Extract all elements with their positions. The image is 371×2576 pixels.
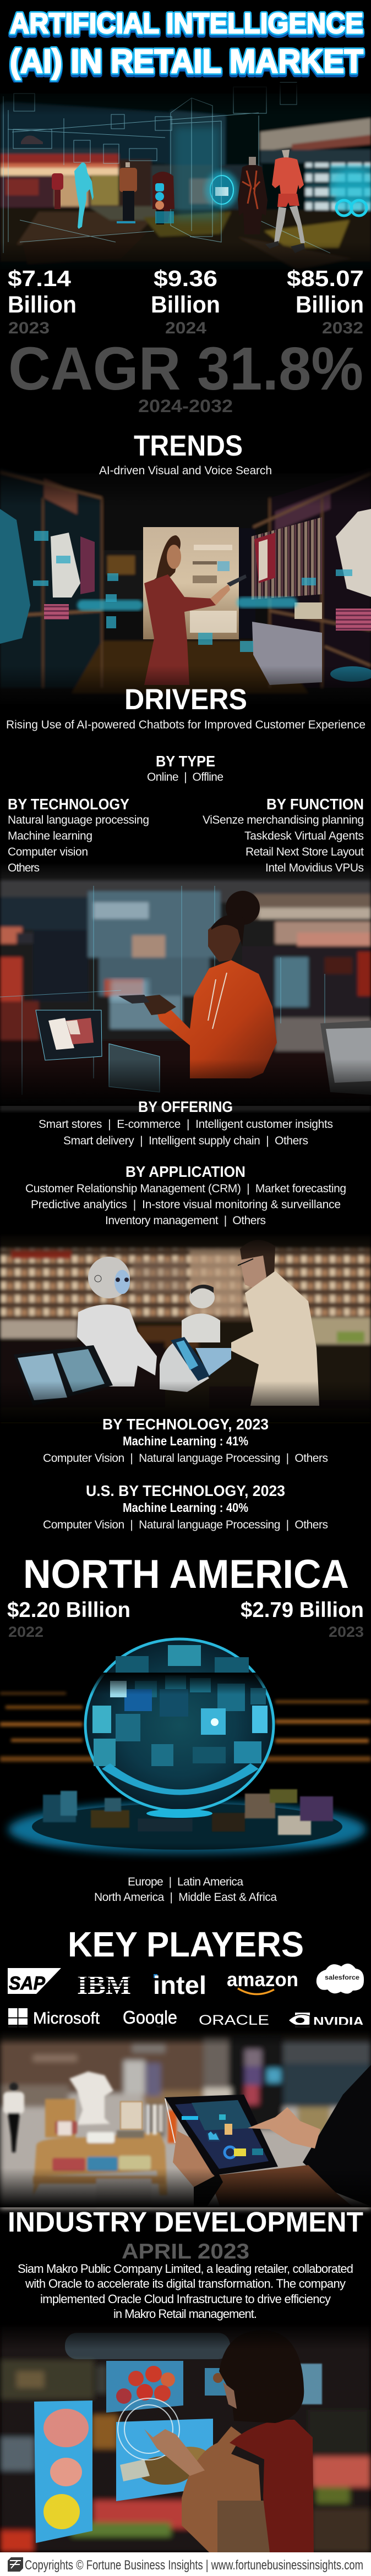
logo: intel: intel — [153, 1971, 206, 1999]
CAGR period: 2024-2032 — [138, 396, 233, 416]
illustration: blurred store with tablet — [0, 2025, 371, 2209]
hologram glow — [110, 979, 149, 1001]
hanging rail clothes — [146, 2104, 177, 2143]
stat: 2024 market size — [151, 266, 220, 337]
stat: 2022 region size — [7, 1598, 130, 1640]
floating hologram tags — [33, 531, 352, 652]
heading: key players: KEY PLAYERS — [68, 1925, 304, 1964]
logo: salesforce: salesforce — [325, 1974, 359, 1981]
stat: U.S. by technology 2023: U.S. BY TECHNOLOGY, 2023 — [86, 1482, 285, 1499]
stat: 2023 market size: 2023 — [8, 319, 50, 337]
segment: by function: ViSenze merchandising planning — [203, 814, 364, 826]
stat: 2032 market size — [287, 266, 364, 337]
top fade — [0, 83, 371, 116]
logo: IBM: IBM — [77, 1970, 131, 2000]
hologram chart panel — [109, 1044, 160, 1092]
wireframe display boxes — [3, 83, 330, 253]
CAGR: CAGR 31.8% — [8, 335, 363, 403]
icon: Fortune Business Insights — [8, 2557, 23, 2572]
section: industry development — [8, 2206, 363, 2321]
segment: by application: Customer Relationship Management (CRM) | Market forecasting — [25, 1182, 346, 1195]
scanner device — [160, 1337, 211, 1392]
wooden display table — [33, 2099, 167, 2206]
glow: cyan hologram orb — [205, 171, 238, 209]
bottom fade — [0, 1843, 371, 1865]
stat: 2023 market size: Billion — [8, 292, 77, 318]
figure: red shirt mannequin — [265, 150, 305, 253]
display: car panel — [21, 135, 43, 144]
illustration: woman with tablet in clothing store — [0, 462, 371, 710]
stat: by technology 2023: Computer Vision | Natural language Processing | Others — [43, 1452, 328, 1465]
blurred store background — [0, 2033, 371, 2209]
miniature buildings — [43, 1789, 333, 1835]
cream sign frame — [121, 2102, 142, 2129]
logo: SAP: SAP — [9, 1973, 45, 1994]
stat: 2032 market size: Billion — [296, 292, 364, 318]
right rack: white shirt — [336, 509, 371, 597]
regions list — [94, 1876, 277, 1904]
top fade — [0, 1230, 371, 1257]
touch screens — [14, 1345, 113, 1406]
illustration: woman in orange hoodie — [0, 861, 371, 1111]
bottom fade — [0, 242, 371, 281]
glow: right hologram — [331, 168, 371, 216]
stat: 2022 region size: $2.20 Billion — [7, 1598, 130, 1622]
logo: amazon: amazon — [227, 1968, 298, 1991]
logo: Microsoft — [8, 2008, 100, 2027]
mannequin white tee — [69, 2071, 113, 2125]
left rack: pink clothes — [44, 536, 95, 620]
segment: by offering — [39, 1098, 333, 1147]
stat: 2023 region size — [241, 1598, 364, 1640]
stat: 2022 region size: 2022 — [8, 1624, 43, 1640]
illustration: holographic clothing store — [0, 83, 371, 281]
segment: by offering: Smart delivery | Intelligent supply chain | Others — [63, 1134, 308, 1147]
logo: Oracle: ORACLE — [199, 2013, 269, 2028]
section: trends: TRENDS — [134, 430, 243, 462]
title — [10, 8, 363, 82]
tablet — [165, 2095, 278, 2175]
segment: by technology — [8, 796, 149, 874]
hologram base right — [330, 666, 371, 682]
segment: by application: BY APPLICATION — [126, 1163, 245, 1180]
section: trends — [99, 430, 272, 477]
illustration: woman browsing virtual grocery panels — [0, 2322, 371, 2553]
right rack: striped shirts — [251, 517, 322, 600]
stat: U.S. by technology 2023: Computer Vision | Natural language Processing | Others — [43, 1519, 328, 1531]
segment: by function: Taskdesk Virtual Agents — [244, 830, 364, 842]
right rack: pink stack — [294, 602, 371, 631]
right hand — [248, 2107, 320, 2149]
segment: by function — [203, 796, 364, 874]
illustration: holographic globe over city — [0, 1639, 371, 1865]
figure: hoodie strings — [208, 973, 227, 1029]
city lights — [0, 1692, 371, 1762]
footer — [0, 2552, 371, 2576]
figure: plaid jacket mannequin — [238, 157, 268, 234]
store window — [143, 527, 239, 639]
section: by type: Online | Offline — [147, 771, 223, 783]
bottom fade — [0, 1381, 371, 1422]
section: by type — [147, 753, 223, 783]
left rack: white shirt — [51, 533, 80, 598]
hologram glow band right — [237, 597, 297, 608]
stat: 2024 market size: $9.36 — [154, 266, 217, 291]
segment: by function: Intel Movidius VPUs — [265, 862, 364, 874]
robot: body — [77, 1305, 157, 1386]
panel: right blurred — [296, 2364, 322, 2404]
figure: hand and phone — [118, 995, 176, 1015]
segment: by offering: Smart stores | E-commerce | Intelligent customer insights — [39, 1118, 333, 1131]
bottom fade — [0, 2168, 371, 2207]
figure: face — [208, 922, 241, 962]
regions list: Europe | Latin America — [128, 1876, 243, 1888]
tablet right — [320, 1021, 371, 1095]
sleeve right — [303, 2065, 371, 2206]
robot: small — [182, 1285, 220, 1342]
bottom fade — [0, 666, 371, 710]
segment: by application: Predictive analytics | In-store visual monitoring & surveillance — [31, 1198, 341, 1211]
section: industry development: in Makro Retail management. — [113, 2307, 257, 2321]
hologram glow band left — [77, 600, 143, 611]
figure: woman in red dress — [144, 535, 247, 685]
figure: woman hoodie — [157, 960, 277, 1078]
figure: cyan hologram mannequin — [74, 163, 94, 229]
stat: by technology 2023: Machine Learning : 41% — [123, 1434, 248, 1448]
top fade — [0, 861, 371, 883]
forearm — [209, 2165, 352, 2207]
stat: 2024 market size: Billion — [151, 292, 220, 318]
worker: coat — [231, 1271, 319, 1406]
segment: by application — [25, 1163, 346, 1227]
dark store background — [0, 2325, 371, 2553]
window shelves — [190, 545, 237, 633]
logo: NVIDIA — [288, 2013, 364, 2029]
section: drivers — [6, 683, 365, 731]
section: industry development: INDUSTRY DEVELOPMENT — [8, 2206, 363, 2238]
gloved hands — [195, 1348, 231, 1375]
section: trends: AI-driven Visual and Voice Search — [99, 464, 272, 477]
logo: Google: Google — [123, 2007, 177, 2027]
regions list: North America | Middle East & Africa — [94, 1891, 277, 1904]
stat: U.S. by technology 2023: Machine Learning : 40% — [123, 1500, 248, 1515]
illustration: robot assistant with store worker — [0, 1230, 371, 1422]
globe stand — [146, 1809, 212, 1818]
figure: dark red outfit mannequin — [152, 172, 174, 224]
heading: north america: NORTH AMERICA — [23, 1552, 349, 1597]
figure: left red mannequin — [52, 173, 63, 209]
segment: by offering: BY OFFERING — [138, 1098, 233, 1115]
logo: SAP — [8, 1968, 61, 1994]
stat: 2023 market size: $7.14 — [8, 266, 71, 291]
logo: salesforce — [317, 1964, 364, 1994]
right rack: lower hanging clothes — [252, 622, 322, 685]
segment: by technology: Natural language processing — [8, 814, 149, 826]
platform disc — [32, 1804, 342, 1850]
left rack: teal shirt — [0, 509, 30, 644]
top fade — [0, 462, 371, 506]
stat: by technology 2023: BY TECHNOLOGY, 2023 — [102, 1416, 269, 1433]
top fade — [0, 2025, 371, 2047]
top fade — [0, 1673, 371, 1695]
stat: 2032 market size: $85.07 — [287, 266, 364, 291]
section: drivers: DRIVERS — [124, 683, 247, 716]
segment: by technology: Others — [8, 862, 40, 874]
segment: by technology: BY TECHNOLOGY — [8, 796, 129, 813]
bottom fade — [0, 1059, 371, 1106]
tablet photo — [326, 1028, 371, 1083]
stat: 2023 market size — [8, 266, 77, 337]
segment: by technology: Computer vision — [8, 846, 88, 858]
segment: by application: Inventory management | Others — [105, 1214, 266, 1227]
logo: NVIDIA: NVIDIA — [313, 2014, 364, 2029]
top fade — [0, 2322, 371, 2349]
stat: 2032 market size: 2032 — [322, 319, 363, 337]
panel: small fruit — [205, 2368, 227, 2396]
logo: Microsoft: Microsoft — [33, 2009, 100, 2027]
robot: head — [88, 1257, 130, 1298]
globe — [85, 1639, 274, 1811]
section: industry development: implemented Oracle Cloud Infrastructure to drive efficiency — [40, 2292, 331, 2306]
figure: woman — [144, 2330, 314, 2552]
watch band — [194, 2174, 223, 2207]
section: industry development: APRIL 2023 — [122, 2240, 249, 2263]
worker: hair and face — [238, 1240, 275, 1290]
hologram panels — [0, 886, 325, 1095]
faint virtual shop banner — [65, 2333, 230, 2359]
stat: 2023 region size: 2023 — [329, 1624, 364, 1640]
panel: tomatoes — [106, 2361, 183, 2413]
segment: by technology: Machine learning — [8, 830, 92, 842]
segment: by function: Retail Next Store Layout — [245, 846, 364, 858]
platform glow — [8, 1802, 366, 1857]
shopper — [3, 2082, 24, 2152]
glow: central hologram haze — [173, 127, 220, 220]
segment: by function: BY FUNCTION — [266, 796, 364, 813]
figure: hair and bun — [211, 891, 260, 946]
left hand — [173, 2131, 215, 2187]
figure: mannequin brown shirt — [117, 162, 137, 223]
section: industry development: Siam Makro Public Company Limited, a leading retailer, collaborated — [18, 2262, 353, 2276]
section: drivers: Rising Use of AI-powered Chatbots for Improved Customer Experience — [6, 719, 365, 731]
stat: by technology 2023 — [43, 1416, 328, 1465]
panel: fruit column — [34, 2400, 92, 2543]
hologram screen — [36, 1010, 102, 1060]
section: by type: BY TYPE — [156, 753, 215, 770]
stat: 2024 market size: 2024 — [165, 319, 206, 337]
panel: pineapple — [116, 2398, 213, 2501]
section: industry development: with Oracle to accelerate its digital transformation. The company — [25, 2277, 346, 2290]
stat: 2023 region size: $2.79 Billion — [241, 1598, 364, 1622]
stat: U.S. by technology 2023 — [43, 1482, 328, 1531]
